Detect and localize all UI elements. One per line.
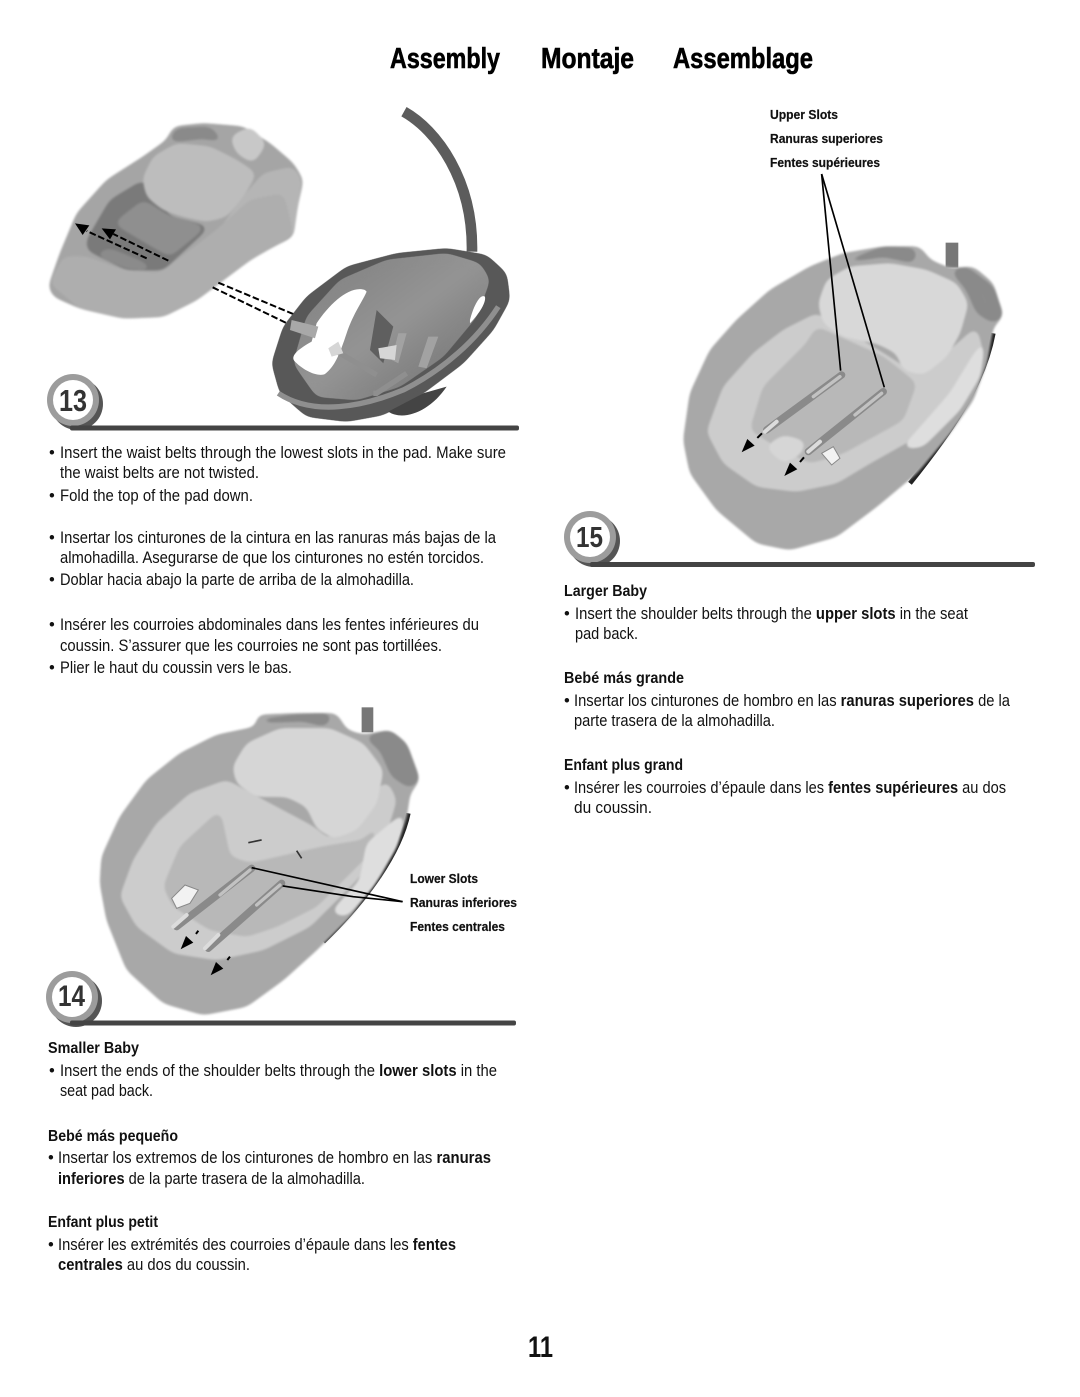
step 13 instructions: • — [49, 616, 55, 634]
step 14 instructions: • — [48, 1236, 54, 1254]
step 15 instructions: Insertar los cinturones de hombro en las ranuras superiores de la — [574, 692, 1011, 710]
buckle — [822, 447, 840, 465]
step 14 instructions: Bebé más pequeño — [48, 1128, 178, 1145]
step 15 instructions: • — [564, 605, 570, 623]
step 13 instructions: • — [49, 487, 55, 505]
step 13 instructions: the waist belts are not twisted. — [60, 464, 259, 482]
pad body — [100, 713, 420, 1015]
lower slots labels: Fentes centrales — [410, 919, 505, 934]
step 14 instructions: Insérer les extrémités des courroies d’épaule dans les fentes — [58, 1236, 456, 1254]
seat stem — [404, 112, 472, 252]
step 14 badge — [46, 971, 102, 1027]
step 14 instructions: Insert the ends of the shoulder belts through the lower slots in the — [60, 1062, 497, 1080]
step 14 instructions: seat pad back. — [60, 1082, 153, 1100]
shoulder belts — [765, 375, 883, 452]
step 13 instructions: • — [49, 444, 55, 462]
seat frame edge — [323, 813, 408, 942]
step 15 instructions: pad back. — [575, 625, 638, 643]
step 15 badge — [564, 511, 620, 567]
upper slots labels — [770, 107, 883, 170]
lower slots labels: Lower Slots — [410, 871, 478, 886]
step 15 instructions: Bebé más grande — [564, 670, 684, 687]
seat shell — [272, 248, 510, 422]
step 15 instructions: Insert the shoulder belts through the upper slots in the seat — [575, 605, 968, 623]
step 15 instructions: du coussin. — [574, 799, 652, 817]
step 15 instructions — [564, 583, 1011, 817]
support pole — [362, 707, 373, 732]
step 14 instructions: • — [49, 1062, 55, 1080]
title: Montaje — [541, 43, 634, 75]
step 15 instructions: Enfant plus grand — [564, 757, 683, 774]
support pole — [946, 243, 958, 268]
step 14 instructions: Smaller Baby — [48, 1040, 139, 1057]
step 14 instructions: Insertar los extremos de los cinturones de hombro en las ranuras — [58, 1149, 491, 1167]
step 13 instructions: Plier le haut du coussin vers le bas. — [60, 659, 292, 677]
step 15 instructions: • — [564, 692, 570, 710]
illustration: step 13 pad and seat — [48, 112, 510, 422]
step 13 instructions: coussin. S’assurer que les courroies ne sont pas tortillées. — [60, 637, 442, 655]
step 13 badge — [47, 374, 103, 430]
step 13 instructions: • — [49, 659, 55, 677]
step 15 instructions: Insérer les courroies d’épaule dans les fentes supérieures au dos — [574, 779, 1006, 797]
step 14 instructions — [48, 1040, 497, 1274]
illustration: step 14 pad with lower slots — [100, 707, 420, 1015]
step 13 instructions: Doblar hacia abajo la parte de arriba de la almohadilla. — [60, 571, 414, 589]
downward arrows — [181, 931, 230, 975]
lower slots labels — [410, 871, 517, 934]
step 13 instructions: Insertar los cinturones de la cintura en las ranuras más bajas de la — [60, 529, 497, 547]
slot marks — [248, 840, 302, 858]
step 13 instructions: almohadilla. Asegurarse de que los cinturones no estén torcidos. — [60, 549, 484, 567]
upper slots labels: Ranuras superiores — [770, 131, 883, 146]
step 14 instructions: • — [48, 1149, 54, 1167]
step 13 instructions: • — [49, 529, 55, 547]
buckle — [172, 885, 198, 908]
upper slots labels: Upper Slots — [770, 107, 838, 122]
upper slots labels: Fentes supérieures — [770, 155, 880, 170]
pad — [48, 123, 303, 318]
step 14 instructions: centrales au dos du coussin. — [58, 1256, 250, 1274]
step 13 badge: 13 — [59, 383, 87, 418]
step 13 instructions: Fold the top of the pad down. — [60, 487, 253, 505]
step 13 instructions — [49, 444, 506, 677]
step 14 badge: 14 — [58, 980, 85, 1013]
step 15 instructions: parte trasera de la almohadilla. — [574, 712, 775, 730]
step 13 instructions: • — [49, 571, 55, 589]
shoulder belts — [173, 868, 282, 948]
lower slots labels: Ranuras inferiores — [410, 895, 517, 910]
title: Assembly — [390, 43, 500, 75]
downward arrows — [742, 433, 804, 476]
page number: 11 — [528, 1331, 553, 1364]
leader lines — [252, 868, 403, 902]
illustration: step 15 pad with upper slots — [683, 174, 1004, 550]
step 14 instructions: inferiores de la parte trasera de la almohadilla. — [58, 1170, 365, 1188]
pad body — [683, 247, 1004, 550]
step 15 rule — [590, 562, 1035, 567]
step 14 rule — [70, 1020, 516, 1026]
leader lines — [822, 174, 884, 387]
step 15 badge: 15 — [576, 522, 603, 554]
step 15 instructions: Larger Baby — [564, 583, 647, 600]
step 15 instructions: • — [564, 779, 570, 797]
step 14 instructions: Enfant plus petit — [48, 1214, 159, 1231]
dashed arrows through pad — [87, 231, 375, 348]
seat frame edge — [910, 333, 993, 483]
step 13 instructions: Insérer les courroies abdominales dans les fentes inférieures du — [60, 616, 479, 634]
title — [390, 43, 813, 75]
step 13 rule — [70, 426, 519, 430]
step 13 instructions: Insert the waist belts through the lowest slots in the pad. Make sure — [60, 444, 506, 462]
title: Assemblage — [673, 43, 813, 75]
